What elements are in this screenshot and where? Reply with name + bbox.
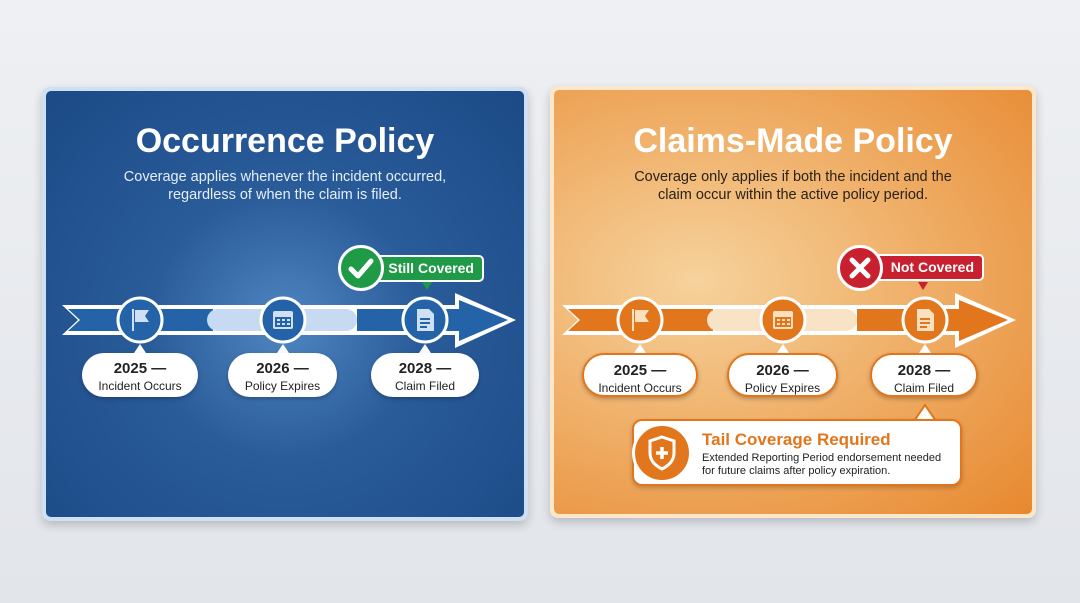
label: 2028: 2028 —	[399, 360, 451, 377]
callout: tail coverage required: Extended Reporting Period endorsement needed	[702, 452, 941, 464]
callout: tail coverage required: Tail Coverage Required	[702, 430, 891, 449]
icon: flag	[132, 309, 149, 331]
subtitle: claims-made: claim occur within the active policy period.	[658, 187, 928, 203]
title: occurrence policy: Occurrence Policy	[136, 122, 434, 160]
label: 2028: Claim Filed	[395, 379, 455, 393]
subtitle: claims-made: Coverage only applies if both the incident and the	[634, 169, 952, 185]
callout: tail coverage required: for future claims after policy expiration.	[702, 465, 890, 477]
label: 2026: Policy Expires	[745, 381, 820, 395]
label: 2025: Incident Occurs	[98, 379, 182, 393]
badge: still covered	[338, 245, 484, 291]
label: 2026: 2026 —	[256, 360, 309, 377]
subtitle: claims-made	[634, 169, 952, 203]
subtitle: occurrence	[124, 169, 446, 203]
label: 2025: 2025 —	[614, 362, 666, 379]
badge: still covered: Still Covered	[388, 260, 474, 276]
icon: calendar	[273, 311, 293, 329]
panel: claims-made policy	[550, 86, 1036, 518]
label: 2026: Policy Expires	[245, 379, 320, 393]
label: 2028: 2028 —	[898, 362, 950, 379]
icon: calendar	[773, 311, 793, 329]
subtitle: occurrence: Coverage applies whenever the incident occurred,	[124, 169, 446, 185]
label: 2028	[371, 353, 479, 397]
label: 2026	[228, 353, 337, 397]
label: 2025	[82, 353, 198, 397]
icon: shield	[632, 423, 692, 483]
label: 2025: 2025 —	[114, 360, 166, 377]
panel: occurrence policy	[42, 87, 528, 521]
icon: flag	[632, 309, 649, 331]
title: claims-made policy: Claims-Made Policy	[633, 122, 953, 160]
icon: document	[417, 309, 434, 331]
label: 2025	[582, 353, 698, 397]
label: 2026: 2026 —	[756, 362, 809, 379]
label: 2028	[870, 353, 978, 397]
subtitle: occurrence: regardless of when the claim is filed.	[168, 187, 402, 203]
label: 2025: Incident Occurs	[598, 381, 682, 395]
callout: tail coverage required	[632, 419, 962, 486]
timeline: occurrence	[62, 282, 516, 353]
badge: not covered	[837, 245, 984, 291]
label: 2026	[727, 353, 838, 397]
icon: document	[917, 309, 934, 331]
label: 2028: Claim Filed	[894, 381, 954, 395]
badge: not covered: Not Covered	[891, 259, 974, 275]
